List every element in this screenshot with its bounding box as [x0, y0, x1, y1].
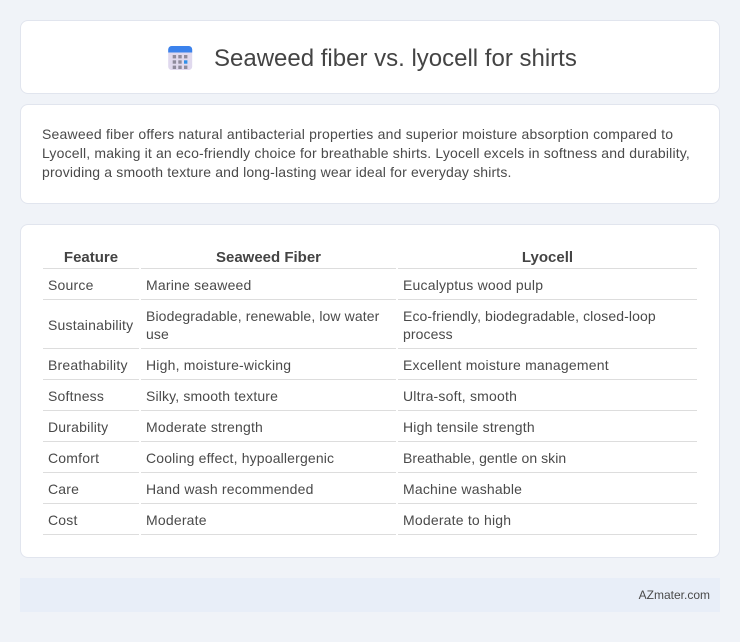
row: softness: Softness [48, 388, 104, 404]
row: care: Machine washable [403, 481, 522, 497]
row: comfort: Cooling effect, hypoallergenic [146, 450, 334, 466]
table header: Lyocell [522, 249, 573, 266]
summary paragraph: providing a smooth texture and long-lasting wear ideal for everyday shirts. [42, 164, 512, 180]
row: breathability: Excellent moisture management [403, 357, 609, 373]
row: sustainability: process [403, 326, 453, 342]
row: comfort [43, 450, 697, 473]
row: comfort: Comfort [48, 450, 99, 466]
row: breathability: Breathability [48, 357, 128, 373]
table header [43, 249, 697, 269]
row: comfort: Breathable, gentle on skin [403, 450, 566, 466]
icon: calendar [168, 46, 192, 70]
row: breathability [43, 357, 697, 380]
summary paragraph [42, 126, 690, 180]
row: source: Marine seaweed [146, 277, 252, 293]
summary paragraph: Seaweed fiber offers natural antibacterial properties and superior moisture absorption compared to [42, 126, 673, 142]
panel: title [20, 20, 720, 94]
row: softness [43, 388, 697, 411]
summary paragraph: Lyocell, making it an eco-friendly choice for breathable shirts. Lyocell excels in softness and durability, [42, 145, 690, 161]
row: source: Eucalyptus wood pulp [403, 277, 543, 293]
row: durability: High tensile strength [403, 419, 535, 435]
row: durability: Durability [48, 419, 108, 435]
row: breathability: High, moisture-wicking [146, 357, 291, 373]
footer credit: AZmater.com [639, 588, 710, 602]
row: cost: Cost [48, 512, 78, 528]
row: sustainability [43, 308, 697, 349]
row: sustainability: Sustainability [48, 317, 133, 333]
table header: Seaweed Fiber [216, 249, 321, 266]
row: sustainability: use [146, 326, 169, 342]
row: cost: Moderate to high [403, 512, 511, 528]
row: durability: Moderate strength [146, 419, 263, 435]
panel: summary text [20, 104, 720, 204]
row: durability [43, 419, 697, 442]
footer bar [20, 578, 720, 612]
row: source: Source [48, 277, 94, 293]
row: source [43, 277, 697, 300]
row: cost: Moderate [146, 512, 207, 528]
table header: Feature [64, 249, 118, 266]
row: sustainability: Eco-friendly, biodegradable, closed-loop [403, 308, 656, 324]
row: care: Hand wash recommended [146, 481, 314, 497]
panel: comparison table [20, 224, 720, 558]
row: softness: Ultra-soft, smooth [403, 388, 517, 404]
row: care: Care [48, 481, 79, 497]
heading: Seaweed fiber vs. lyocell for shirts [214, 45, 577, 72]
row: softness: Silky, smooth texture [146, 388, 278, 404]
row: care [43, 481, 697, 504]
row: sustainability: Biodegradable, renewable, low water [146, 308, 379, 324]
